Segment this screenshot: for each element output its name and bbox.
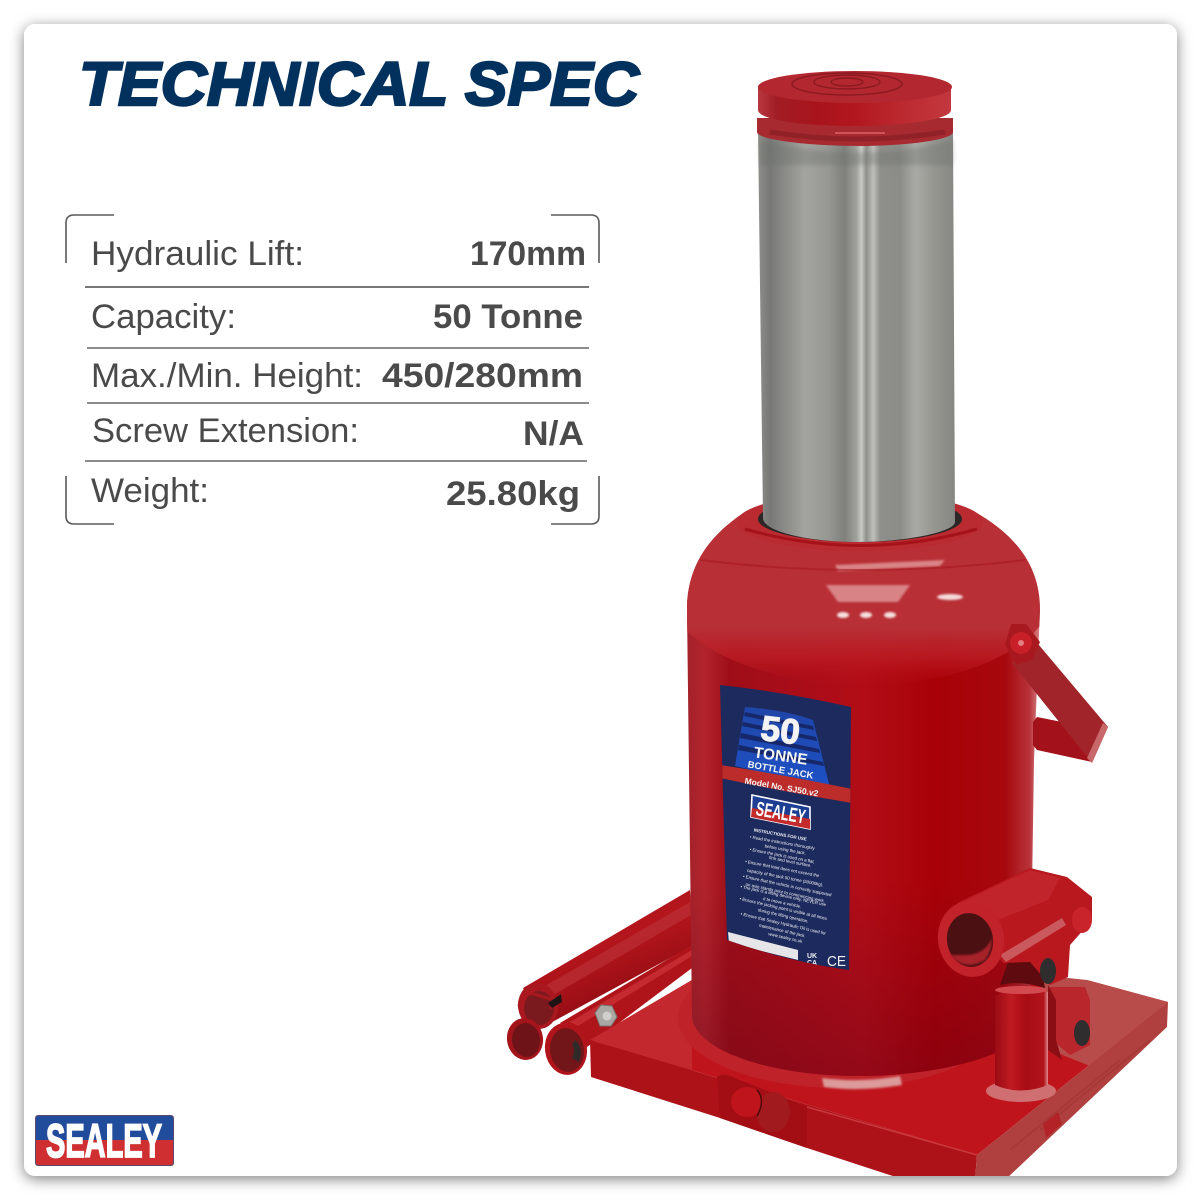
lower arm: [1033, 717, 1092, 762]
label: red band: [720, 765, 852, 803]
row: capacity: 50 Tonne: [433, 298, 583, 336]
bracket: corners: [66, 215, 599, 524]
pump weld: [986, 1084, 1056, 1102]
upper slotted tube: [523, 890, 694, 1027]
band: [1012, 638, 1108, 763]
row: hydraulic lift: 170mm: [470, 235, 586, 273]
label text: [739, 709, 833, 944]
icon: black rivets: [1040, 958, 1090, 1046]
carry handle bail: [1005, 624, 1108, 763]
plate side face: [975, 1002, 1168, 1180]
pump cylinder: [995, 989, 1048, 1090]
icon: UKCA and CE marks: [807, 953, 846, 966]
label text: during the lifting operation.: [758, 907, 809, 924]
neck collar: [740, 504, 979, 515]
row: hydraulic lift: Hydraulic Lift:: [91, 235, 304, 273]
label text: capacity of the jack 50 tonne (50000kg).: [747, 868, 824, 887]
lower tube: [560, 945, 692, 1047]
pump assembly: [932, 868, 1092, 1102]
icon: UKCA and CE marks: CE: [827, 953, 846, 970]
weld flange: [692, 1019, 960, 1088]
panel: specification table: [66, 215, 599, 524]
logo: SEALEY: SEALEY: [46, 1114, 162, 1167]
label text: it to move a vehicle.: [763, 896, 802, 909]
row: screw extension: Screw Extension:: [92, 412, 359, 450]
base plate: [590, 975, 1168, 1180]
icon: UKCA and CE marks: UK: [807, 953, 817, 960]
chevron graphic: [735, 707, 830, 788]
ram: steel cylinder: [757, 71, 955, 542]
row: screw extension: N/A: [523, 415, 584, 453]
rear link plate: [1050, 987, 1090, 1055]
product label: [720, 685, 852, 970]
pump socket: [957, 868, 1092, 985]
side pin: [1043, 1112, 1062, 1138]
icon: UKCA and CE marks: CA: [807, 960, 817, 967]
label text: • Ensure that load does not exceed the: [745, 859, 820, 878]
stored handle tubes: [504, 890, 694, 1078]
row: weight: Weight:: [91, 472, 209, 510]
label text: before using the jack.: [764, 843, 806, 856]
row: max min height: Max./Min. Height:: [91, 357, 363, 395]
label text: on axle stands prior to commencing work.: [745, 882, 825, 903]
label text: Model No. SJ50.v2: [744, 776, 819, 798]
jack body: [680, 493, 1045, 1080]
label text: • The jack is a lifting device only, NEVER use: [740, 884, 827, 907]
label text: firm and level surface.: [769, 855, 812, 868]
row: weight: [91, 472, 580, 513]
label text: • Ensure the jack is used on a flat,: [749, 847, 815, 864]
row: capacity: Capacity:: [91, 298, 236, 336]
label text: 50: [759, 709, 802, 752]
row: max min height: [91, 357, 583, 395]
row: capacity: [91, 298, 583, 336]
label text: • Read the instructions thoroughly: [749, 834, 816, 851]
label text: www.sealey.co.uk: [768, 931, 804, 944]
label text: • Ensure the jacking point is visible at all times: [739, 896, 828, 921]
hex bolt plate: [1005, 624, 1040, 665]
title: TECHNICAL SPEC: [79, 50, 640, 118]
dome: [687, 512, 1040, 672]
logo on label: SEALEY: [754, 798, 808, 829]
row: max min height: 450/280mm: [382, 357, 583, 395]
label text: • Ensure that the vehicle is correctly supported: [743, 874, 833, 897]
label text: BOTTLE JACK: [747, 759, 814, 782]
label text: maintenance of the jack.: [759, 923, 806, 938]
row: weight: 25.80kg: [446, 475, 580, 513]
product photo: bottle jack: [504, 71, 1168, 1180]
ram collar: [757, 118, 953, 146]
saddle cap: [758, 86, 951, 126]
logo on label: [751, 795, 810, 829]
white serial box: [728, 932, 798, 960]
plate top surface: [590, 980, 1168, 1155]
row: screw extension: [92, 412, 584, 453]
plate front edge: [590, 1040, 977, 1180]
icon: hex bolt: [595, 1005, 617, 1026]
logo: SEALEY: [35, 1114, 174, 1167]
front pin: [717, 1075, 807, 1148]
label text: INSTRUCTIONS FOR USE: [753, 827, 807, 842]
dome highlights: [826, 560, 963, 618]
label text: TONNE: [753, 744, 809, 769]
label text: • Ensure that Sealey Hydraulic Oil is used for: [740, 911, 827, 936]
row: hydraulic lift: [91, 235, 586, 273]
